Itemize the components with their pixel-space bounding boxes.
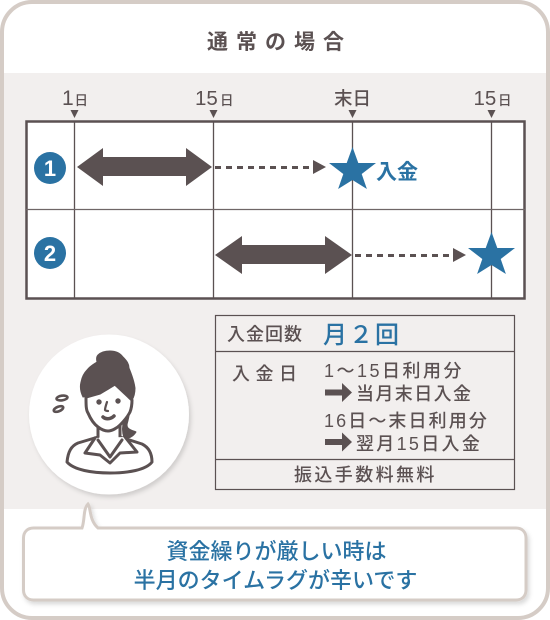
sweat drops	[53, 395, 68, 413]
hair	[80, 351, 135, 400]
icon: star 1	[329, 147, 376, 189]
icon: woman	[67, 351, 152, 473]
callout text: 資金繰りが厳しい時は	[166, 539, 387, 564]
row number 1: 1	[44, 156, 56, 181]
date markers	[70, 110, 496, 118]
arrow: dashed to payment 1	[215, 160, 326, 174]
date labels: 日	[74, 93, 88, 108]
row: payment dates: 1～15日利用分	[324, 361, 464, 381]
date labels: 末日	[334, 88, 371, 109]
panel: shaded background	[4, 73, 546, 509]
row: payment dates: 16日～末日利用分	[324, 411, 489, 431]
row: payment count	[227, 322, 401, 349]
title: 通常の場合	[207, 31, 352, 54]
row: payment dates: 当月末日入金	[356, 384, 472, 404]
body	[67, 426, 152, 473]
date labels: 15	[195, 87, 218, 110]
row number 2	[34, 237, 66, 269]
collar	[85, 437, 137, 463]
label: payment: 入金	[376, 161, 418, 184]
date labels: 日	[498, 93, 512, 108]
eyes	[96, 398, 121, 405]
mouth	[103, 416, 114, 419]
grid	[26, 121, 525, 299]
row: payment count: 月２回	[323, 322, 401, 349]
row: payment dates: 入金日	[232, 364, 302, 384]
nose	[105, 402, 108, 411]
brow	[110, 394, 118, 396]
arrow: dashed to payment 2	[355, 248, 466, 262]
row: fee: 振込手数料無料	[294, 465, 437, 485]
date labels: 日	[220, 93, 234, 108]
date labels	[62, 87, 512, 110]
avatar	[29, 334, 189, 494]
arrow: period 1	[77, 148, 212, 186]
callout bubble	[24, 504, 526, 600]
row number 2: 2	[44, 241, 56, 266]
panel: terms table	[215, 316, 515, 490]
date labels: 1	[62, 87, 74, 110]
icon: star 2	[468, 232, 515, 274]
face	[86, 384, 132, 431]
callout text: 半月のタイムラグが辛いです	[134, 568, 417, 593]
row: payment count: 入金回数	[227, 324, 303, 344]
panel: timeline chart	[26, 87, 525, 299]
row: payment dates	[232, 361, 489, 454]
arrow: period 2	[215, 236, 352, 274]
ponytail	[122, 412, 136, 438]
callout text	[134, 539, 417, 593]
row number 1	[34, 152, 66, 184]
date labels: 15	[474, 87, 496, 110]
row: payment dates: 翌月15日入金	[356, 434, 482, 454]
